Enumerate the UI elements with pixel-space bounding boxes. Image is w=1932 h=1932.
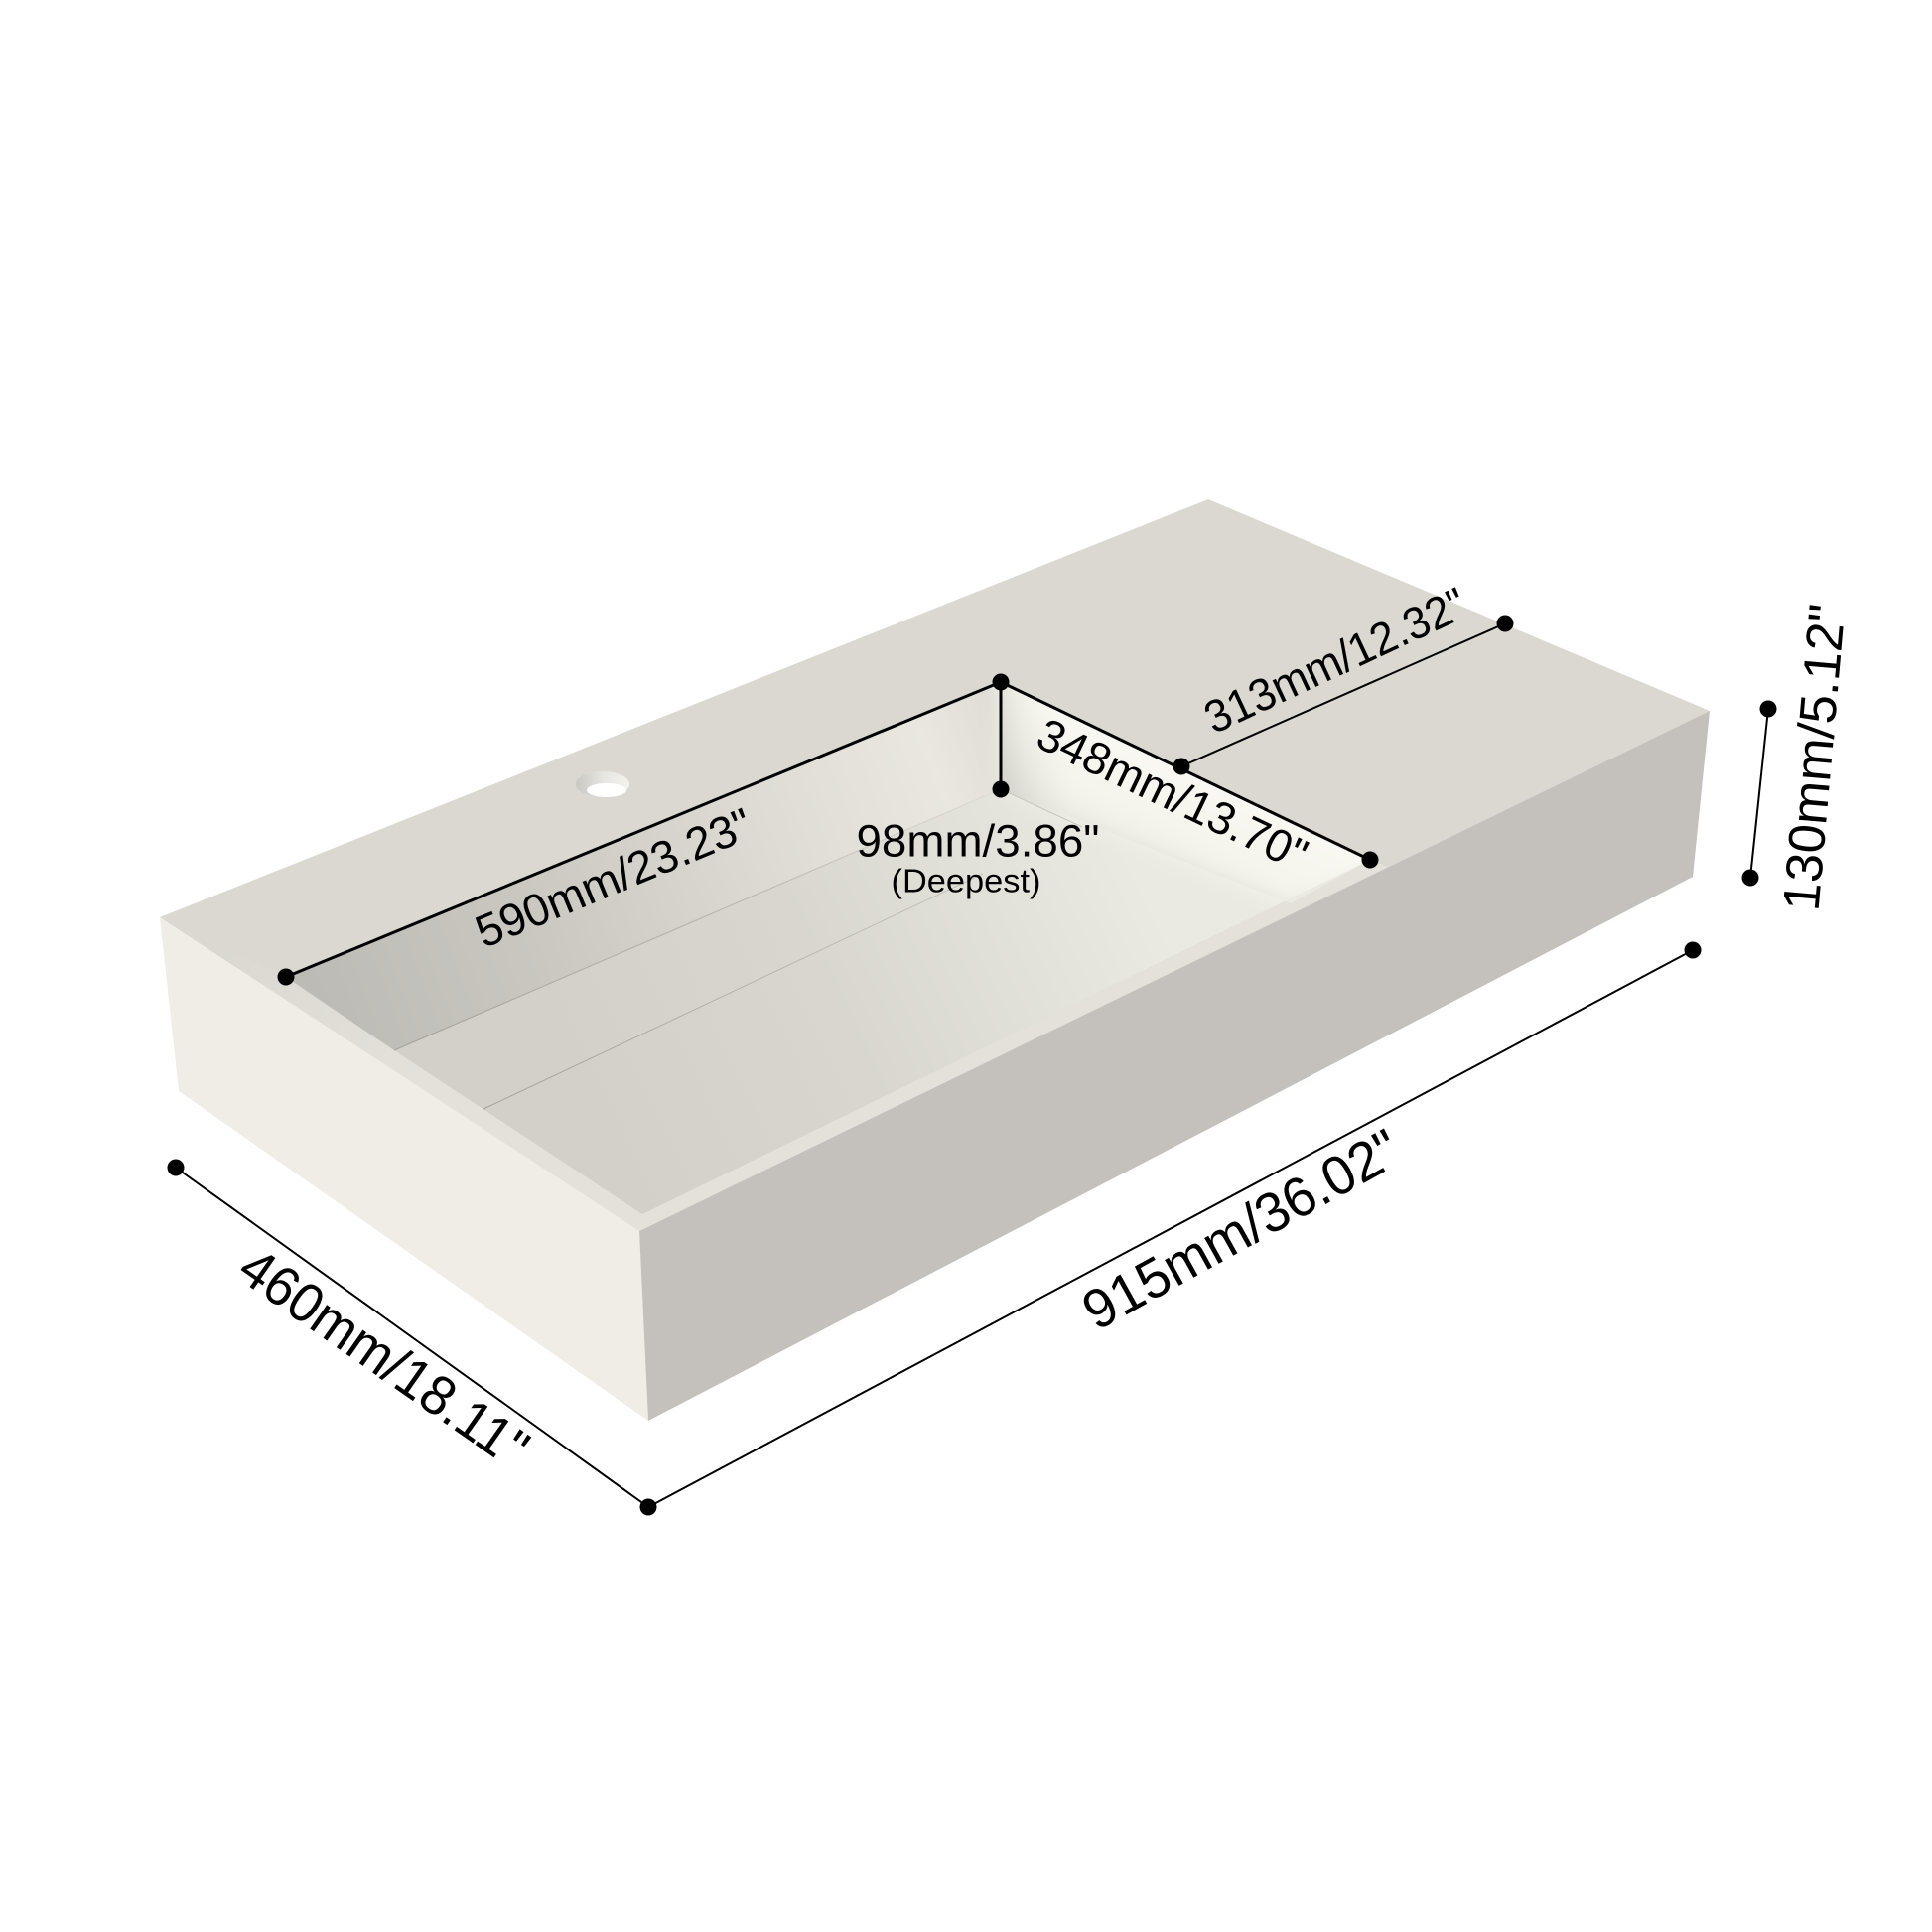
right face	[639, 711, 1710, 1421]
basin back-left wall	[286, 682, 1001, 1050]
sink body	[160, 499, 1710, 1421]
basin back-right wall	[996, 687, 1362, 901]
dimension: 313mm	[1173, 577, 1513, 774]
dimension: 313mm: 313mm/12.32"	[1196, 577, 1474, 744]
dimension: 98mm deepest: 98mm/3.86"	[856, 816, 1100, 866]
dimension: 915mm	[639, 941, 1702, 1515]
dimension: 348mm	[1001, 682, 1378, 881]
dimension: 348mm: 348mm/13.70"	[1030, 708, 1315, 881]
dimension: 590mm	[278, 682, 1001, 985]
sink dimension diagram	[160, 499, 1844, 1515]
floor seam	[483, 874, 983, 1109]
front rim	[160, 860, 1388, 1231]
top surface	[160, 499, 1710, 1231]
right wall to floor line	[1001, 789, 1082, 827]
faucet hole	[576, 771, 629, 797]
dimension: 460mm: 460mm/18.11"	[228, 1235, 540, 1479]
dimension: 98mm deepest	[856, 673, 1100, 899]
dimension: 915mm: 915mm/36.02"	[1071, 1116, 1411, 1342]
dimension: 460mm	[167, 1160, 648, 1507]
left face	[160, 917, 648, 1421]
right wall corner shading	[1001, 682, 1072, 824]
wall to floor line	[394, 789, 1001, 1050]
dimension: 98mm deepest: (Deepest)	[892, 862, 1040, 899]
basin floor	[394, 789, 1370, 1214]
dimension: 130mm: 130mm/5.12"	[1773, 602, 1857, 913]
dimension: 590mm: 590mm/23.23"	[468, 797, 759, 958]
